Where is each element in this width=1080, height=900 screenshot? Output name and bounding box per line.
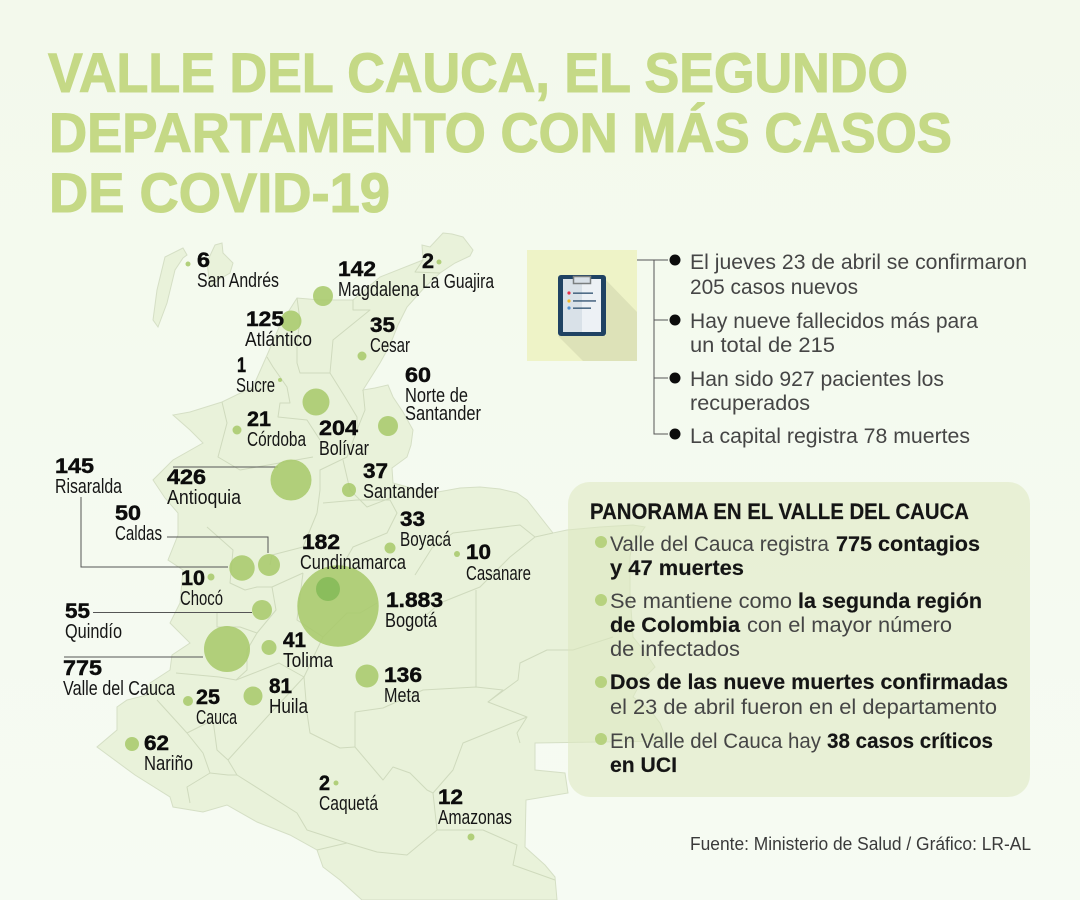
label: Atlántico: Atlántico [245, 329, 312, 351]
label: Caquetá: 2 [319, 772, 330, 795]
label: Valle del Cauca: 775 [63, 657, 102, 680]
label: Nariño [144, 732, 193, 775]
label: Norte de Santander [405, 364, 481, 425]
panel text: muertes confirmadas: el 23 de abril fueron en el departamento [610, 696, 997, 719]
label: Meta: Meta [384, 685, 421, 707]
label: Tolima [283, 629, 334, 672]
label: Sucre [236, 354, 275, 397]
label: Antioquia: Antioquia [167, 487, 242, 509]
label: Caldas [115, 502, 162, 545]
panel text: contagios: y 47 muertes [610, 557, 744, 580]
label: La Guajira: La Guajira [422, 271, 495, 293]
panel text: segunda región: la segunda región [798, 590, 982, 613]
islands: San Andrés y Providencia [153, 243, 233, 327]
label: Quindío [65, 600, 122, 643]
label: Antioquia [167, 466, 242, 509]
label: Bolívar [319, 417, 369, 460]
leader lines [64, 467, 278, 657]
panel text: segunda región: de infectados [610, 638, 740, 661]
label: Meta: 136 [384, 664, 422, 687]
label: Chocó [180, 567, 223, 610]
label: Cauca [196, 686, 238, 729]
label: Chocó: 10 [181, 567, 205, 590]
label: Córdoba: Córdoba [247, 429, 307, 451]
label: Cesar: Cesar [370, 335, 410, 357]
bubbles [125, 260, 474, 840]
label: Meta [384, 664, 422, 707]
icon: clipboard [527, 250, 637, 361]
label: Amazonas: 12 [438, 786, 463, 809]
label: Norte de Santander: 60 [405, 364, 431, 387]
label: Santander: 37 [363, 460, 388, 483]
label: Risaralda: Risaralda [55, 476, 123, 498]
label: Atlántico [245, 308, 312, 351]
label: San Andrés: 6 [197, 249, 210, 272]
panel text: muertes confirmadas [610, 671, 1008, 719]
label: Magdalena: 142 [338, 258, 376, 281]
label: Boyacá: 33 [400, 508, 425, 531]
label: Amazonas: Amazonas [438, 807, 512, 829]
label: Nariño: 62 [144, 732, 169, 755]
label: La Guajira: 2 [422, 250, 434, 273]
source: Fuente: Ministerio de Salud / Gráfico: LR-AL [690, 834, 1031, 854]
text block: key facts: Hay nueve fallecidos más para [690, 310, 978, 333]
label: Tolima: 41 [283, 629, 306, 652]
title: DEPARTAMENTO CON MÁS CASOS [49, 101, 952, 164]
label: Magdalena: Magdalena [338, 279, 420, 301]
label: Bolívar: Bolívar [319, 438, 369, 460]
label: Córdoba [247, 408, 307, 451]
label: Cundinamarca: Cundinamarca [300, 552, 407, 574]
panel text: contagios: Valle del Cauca registra [610, 533, 829, 556]
panel text: contagios: 775 contagios [836, 533, 980, 556]
label: Atlántico: 125 [246, 308, 284, 331]
map of Colombia [97, 233, 667, 900]
label: Cesar [370, 314, 410, 357]
title [48, 41, 952, 224]
label: Quindío: 55 [65, 600, 90, 623]
mainland outline [97, 233, 667, 900]
label: Antioquia: 426 [167, 466, 206, 489]
label: Caquetá: Caquetá [319, 793, 379, 815]
label: Tolima: Tolima [283, 650, 334, 672]
label: Cauca: Cauca [196, 707, 238, 729]
label: Valle del Cauca [63, 657, 176, 700]
label: Huila [269, 675, 309, 718]
label: Boyacá [400, 508, 452, 551]
label: Casanare: 10 [466, 541, 491, 564]
label: Amazonas [438, 786, 512, 829]
panel: Panorama en el Valle del Cauca [568, 482, 1030, 797]
panel text: casos críticos [610, 730, 993, 777]
title: DE COVID-19 [49, 161, 390, 224]
label: Sucre: 1 [237, 354, 246, 377]
label: Caquetá [319, 772, 379, 815]
panel text: contagios [610, 533, 980, 580]
panel text: casos críticos: 38 casos críticos [827, 730, 993, 753]
panel text: casos críticos: en UCI [610, 754, 677, 777]
label: Caldas: Caldas [115, 523, 162, 545]
text block: key facts: Han sido 927 pacientes los [690, 368, 944, 391]
label: Casanare [466, 541, 531, 585]
department borders [157, 260, 613, 880]
label: San Andrés [197, 249, 279, 292]
label: Cesar: 35 [370, 314, 395, 337]
label: Bogotá: 1.883 [386, 589, 443, 612]
label: Córdoba: 21 [247, 408, 271, 431]
panel text: segunda región [610, 590, 982, 661]
panel text: casos críticos: En Valle del Cauca hay [610, 730, 821, 753]
label: Sucre: Sucre [236, 375, 275, 397]
label: Nariño: Nariño [144, 753, 193, 775]
label: Cauca: 25 [196, 686, 220, 709]
label: Valle del Cauca: Valle del Cauca [63, 678, 176, 700]
label: Chocó: Chocó [180, 588, 223, 610]
panel heading: PANORAMA EN EL VALLE DEL CAUCA [590, 499, 969, 524]
panel text: segunda región: Se mantiene como [610, 590, 792, 613]
text block: key facts: La capital registra 78 muertes [690, 425, 970, 448]
label: La Guajira [422, 250, 495, 293]
panel text: muertes confirmadas: Dos de las nueve muertes confirmadas [610, 671, 1008, 694]
label: Norte de Santander: Norte de [405, 385, 468, 407]
label: Caldas: 50 [115, 502, 141, 525]
label: Casanare: Casanare [466, 563, 531, 585]
label: Quindío: Quindío [65, 621, 122, 643]
panel text: segunda región: de Colombia [610, 614, 740, 637]
label: Risaralda [55, 455, 123, 498]
text block: key facts [690, 251, 1027, 448]
label: Santander [363, 460, 439, 503]
text block: key facts: recuperados [690, 392, 810, 415]
text block: key facts: 205 casos nuevos [690, 276, 858, 299]
label: Norte de Santander: Santander [405, 403, 481, 425]
text block: key facts: El jueves 23 de abril se confirmaron [690, 251, 1027, 274]
panel bullets [595, 536, 607, 745]
label: Magdalena [338, 258, 420, 301]
label: Huila: 81 [269, 675, 292, 698]
connector and bullets [637, 254, 680, 440]
text block: key facts: un total de 215 [690, 334, 835, 357]
label: Boyacá: Boyacá [400, 529, 452, 551]
label: Bolívar: 204 [319, 417, 358, 440]
label: Huila: Huila [269, 696, 309, 718]
label: Bogotá: Bogotá [385, 610, 438, 632]
label: Bogotá [385, 589, 443, 632]
label: Santander: Santander [363, 481, 439, 503]
panel text: segunda región: con el mayor número [747, 614, 952, 637]
label: San Andrés: San Andrés [197, 270, 279, 292]
title: VALLE DEL CAUCA, EL SEGUNDO [48, 41, 908, 104]
label: Risaralda: 145 [55, 455, 94, 478]
label: Cundinamarca: 182 [302, 531, 340, 554]
label: Cundinamarca [300, 531, 407, 574]
